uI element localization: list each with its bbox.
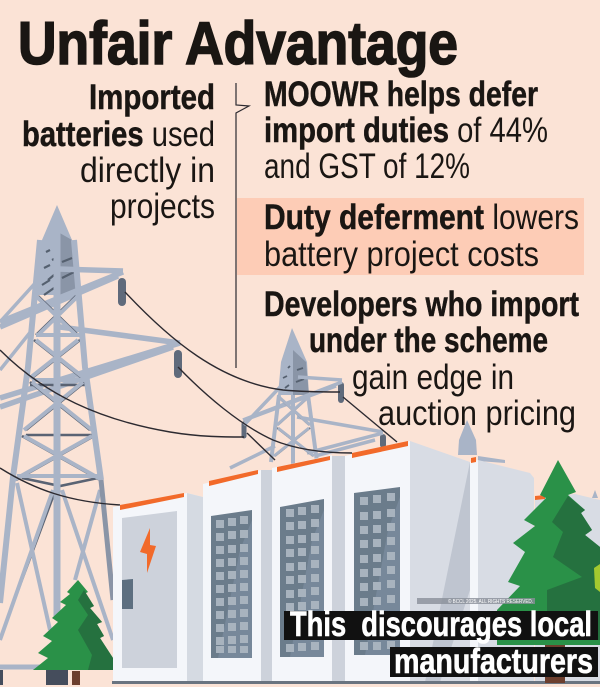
illustration: small tree	[33, 580, 113, 685]
tower light lattice	[0, 296, 113, 667]
text block: developers: gain edge in	[352, 358, 514, 397]
unit 2	[203, 470, 272, 682]
text block: MOOWR: and GST of 12%	[264, 147, 470, 186]
divider connector	[236, 83, 249, 368]
text block: imported batteries: projects	[110, 187, 215, 226]
text block: imported batteries: Imported	[89, 78, 215, 117]
illustration: power lines	[0, 292, 397, 505]
highlighted panel: duty deferment: Duty deferment lowers	[264, 198, 579, 237]
text block: MOOWR	[264, 75, 548, 186]
tower head	[37, 205, 79, 295]
tower footings	[0, 670, 68, 685]
callout: discourages local manufacturers	[284, 605, 598, 681]
illustration: insulators	[122, 282, 383, 445]
unit 4	[345, 441, 410, 682]
illustration: battery storage units	[112, 441, 600, 684]
tower dark lattice	[5, 296, 100, 625]
unit 1	[113, 493, 203, 682]
illustration: large tree	[497, 460, 600, 683]
copyright notice: © BCCL 2025. ALL RIGHTS RESERVED.	[448, 598, 533, 605]
text block: imported batteries	[22, 78, 215, 226]
illustration: power tower left	[0, 205, 180, 685]
text block: MOOWR: import duties of 44%	[264, 111, 548, 150]
highlighted panel: duty deferment	[237, 198, 584, 275]
illustration: small tower top behind battery	[458, 420, 505, 463]
base line	[112, 681, 600, 684]
unit 3	[272, 455, 345, 682]
copyright notice	[417, 598, 535, 605]
text block: developers	[264, 285, 579, 433]
illustration: power tower middle	[230, 328, 383, 468]
title: Unfair Advantage	[18, 10, 458, 77]
far right unit	[535, 490, 600, 682]
tower arms	[0, 269, 180, 407]
tower legs	[0, 230, 101, 617]
text block: MOOWR: MOOWR helps defer	[264, 75, 538, 114]
unit 4 side panels	[410, 441, 534, 682]
text block: imported batteries: directly in	[80, 151, 215, 190]
text block: developers: under the scheme	[309, 321, 548, 360]
text block: imported batteries: batteries used	[22, 115, 215, 154]
text block: developers: auction pricing	[378, 394, 576, 433]
highlighted panel: duty deferment: battery project costs	[264, 235, 539, 274]
